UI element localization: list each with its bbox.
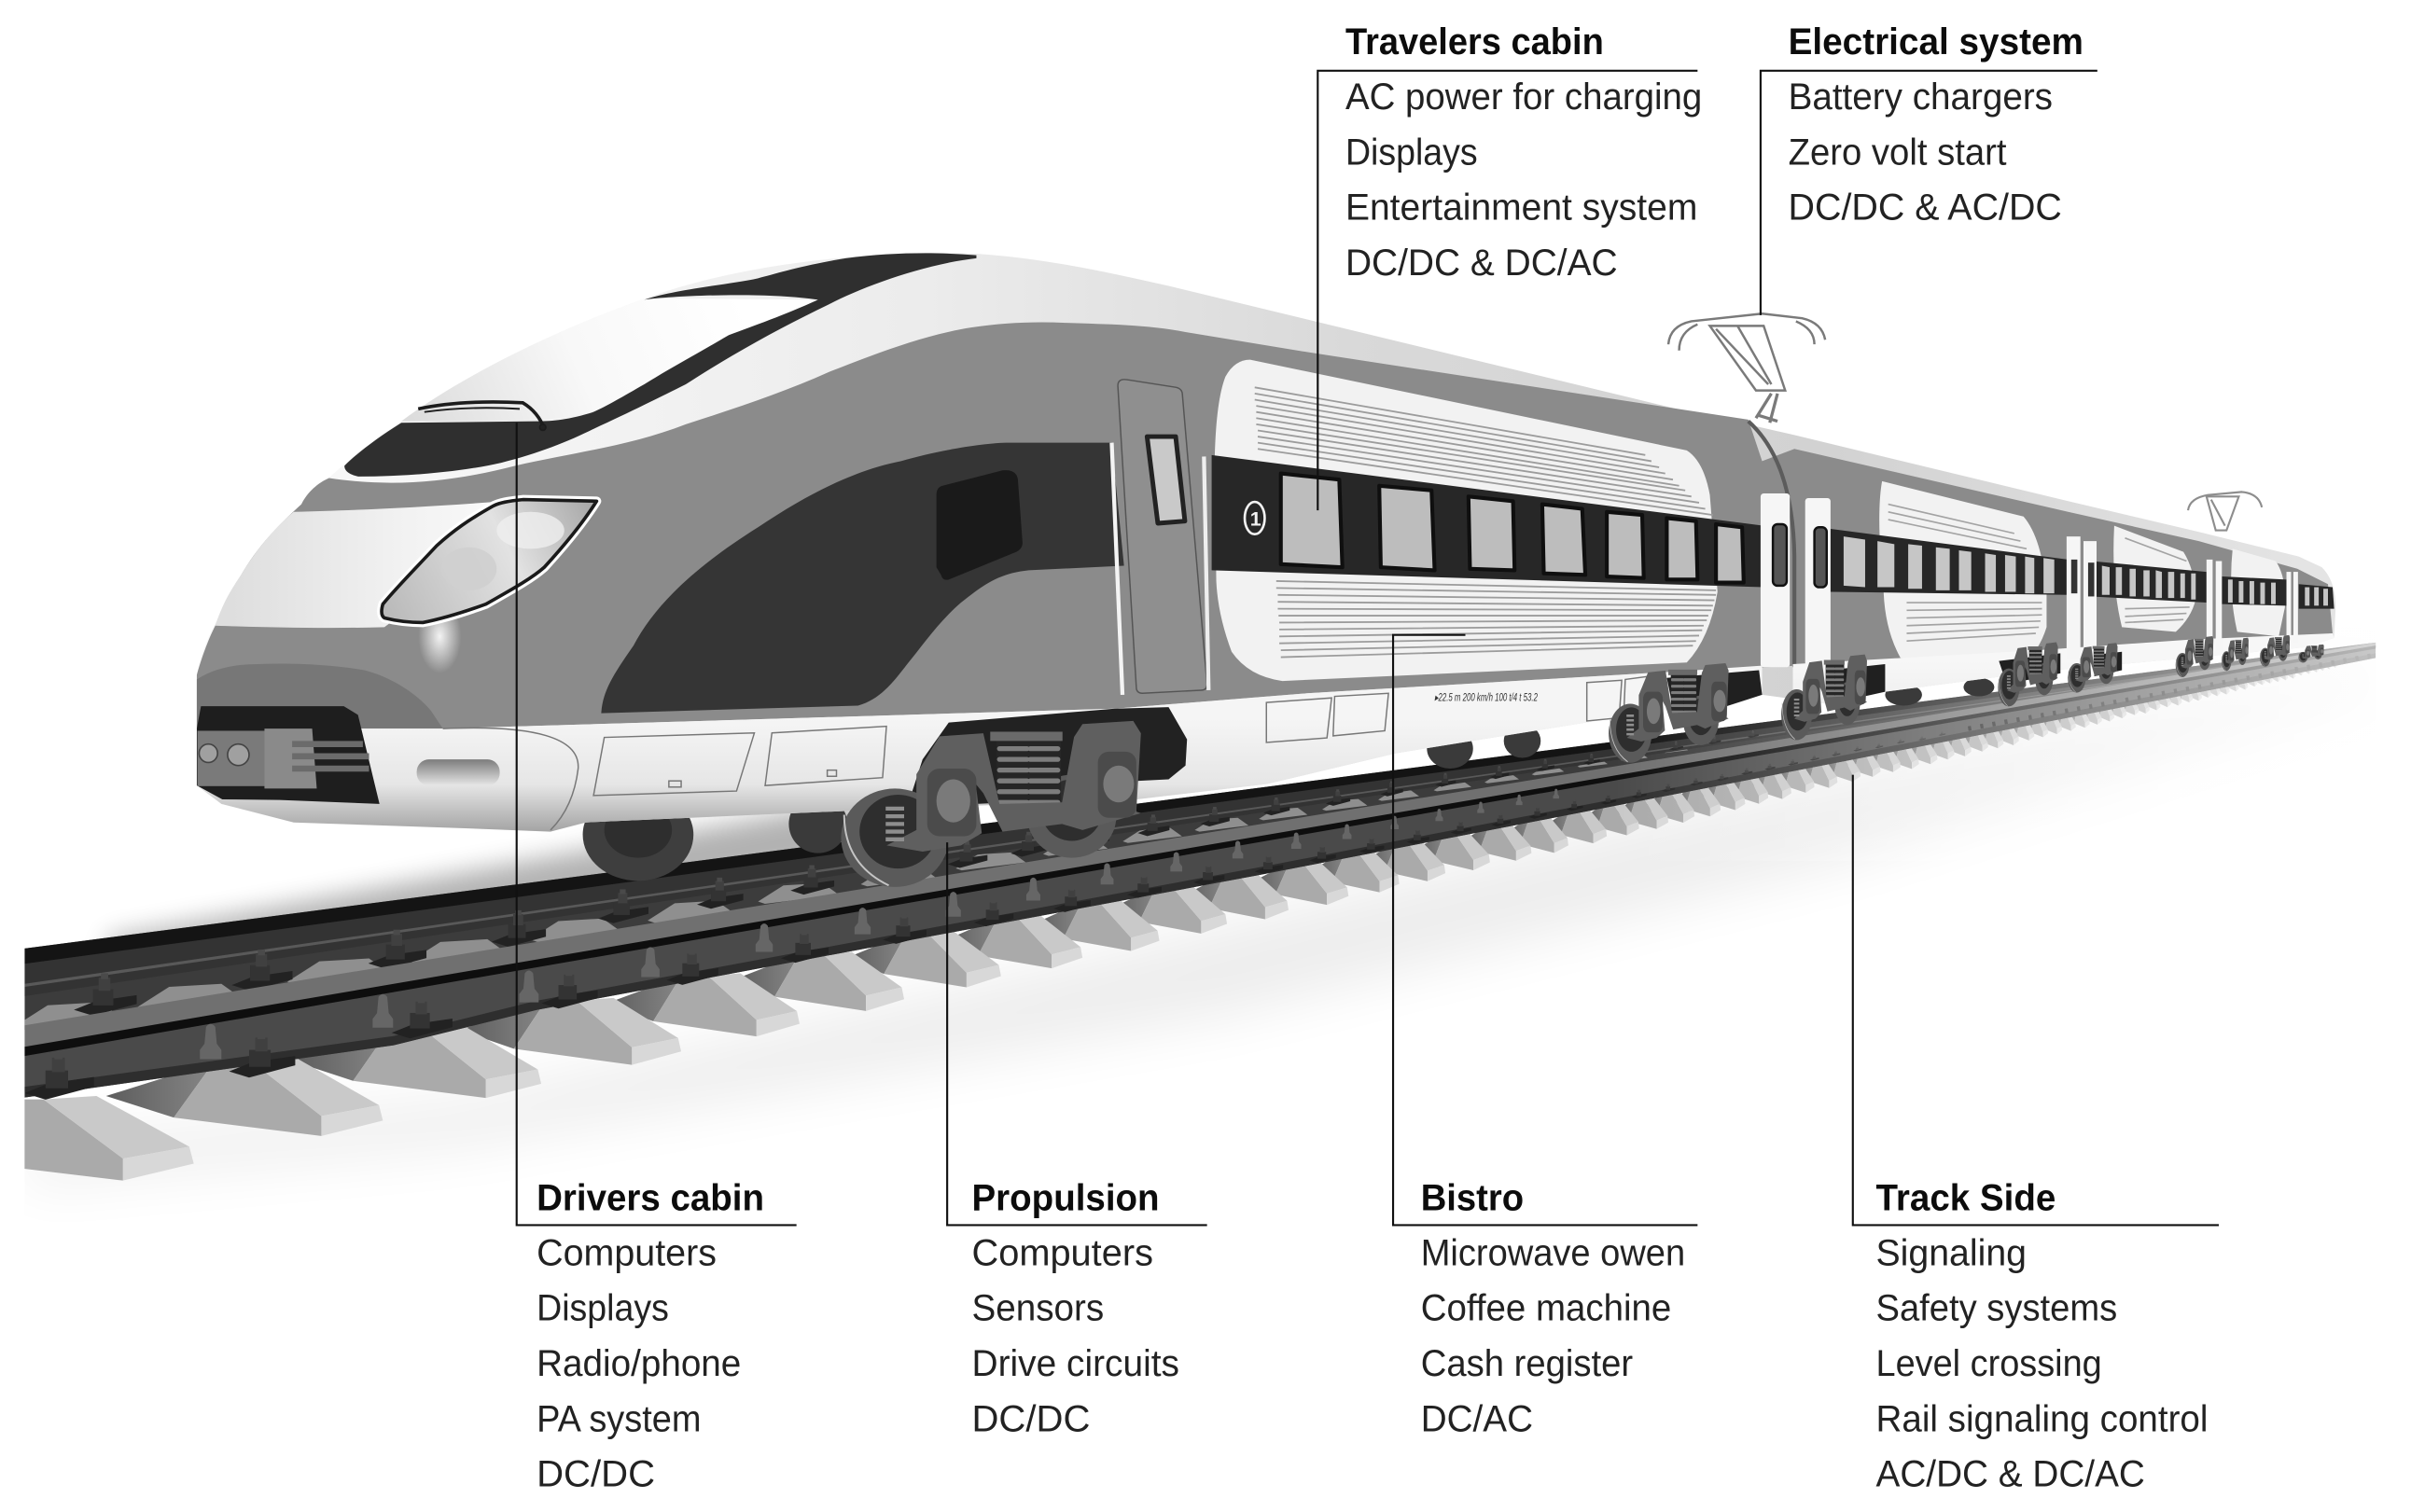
window bands, rear cars [1830,529,2334,609]
railway track [0,615,2376,1181]
far rail fasteners [74,730,1759,1016]
item list: Sensors [972,1288,1104,1329]
item list: Coffee machine [1421,1288,1671,1329]
leader line [1761,71,2097,315]
item list: Safety systems [1876,1288,2117,1329]
car number badge: 1 [1250,508,1261,531]
dark side panel [601,443,1124,714]
heading: Bistro [1421,1177,1524,1218]
leader line [517,423,797,1225]
leader line [1853,775,2219,1225]
headlight [382,500,596,622]
windows, rear cars [1844,536,2328,605]
item list: Drive circuits [972,1343,1179,1384]
train [197,253,2335,887]
concrete sleepers [0,658,2337,1181]
item list: Computers [972,1232,1153,1273]
item list: Displays [1345,132,1478,173]
gangway between cars [1749,422,1794,667]
item list: Cash register [1421,1343,1633,1384]
dark side window [937,470,1023,580]
item list: DC/DC [537,1454,655,1495]
carriage data text: ▸22.5 m 200 km/h 100 t/4 t 53.2 [1435,693,1538,704]
callout: Travelers cabin [1317,21,1702,510]
callout: Electrical system [1761,21,2097,315]
body silhouette [197,253,2335,832]
front bogie [841,721,1141,887]
heading: Propulsion [972,1177,1160,1218]
wheel well, front bogie [907,707,1187,807]
leader line [947,842,1207,1225]
white oval, car 3 [2113,526,2195,631]
callout: Track Side [1853,775,2219,1495]
item list: DC/AC [1421,1398,1533,1439]
heading: Drivers cabin [537,1177,764,1218]
item list: DC/DC & DC/AC [1345,243,1618,284]
glare on nose [418,600,461,673]
car number badge [1245,502,1264,534]
item list: Radio/phone [537,1343,741,1384]
item list [1789,76,2062,229]
item list: Rail signaling control [1876,1398,2208,1439]
item list [537,1232,741,1495]
front lower panel [197,664,443,728]
item list: Displays [537,1288,669,1329]
item list: Battery chargers [1789,76,2053,118]
item list: AC/DC & DC/AC [1876,1454,2145,1495]
white oval panel, car 1 [1215,360,1718,681]
near rail [24,643,2376,1098]
windshield highlight [401,298,818,422]
item list: AC power for charging [1345,76,1702,118]
window band, car 1 [1212,455,1763,588]
item list: Entertainment system [1345,187,1697,229]
windows, car 1 [1281,474,1744,583]
heading: Track Side [1876,1177,2056,1218]
item list [972,1232,1179,1439]
inner sleeper tops [14,746,1688,1030]
wheel wells, rear cars [1666,652,2122,723]
ground shadow under track [99,746,2079,1166]
pantograph: rear [2188,492,2262,531]
item list: PA system [537,1398,701,1439]
coupler recess [197,706,380,804]
wiper [418,402,546,430]
item list: DC/DC & AC/DC [1789,187,2062,229]
item list: Level crossing [1876,1343,2102,1384]
callout: Drivers cabin [517,423,797,1495]
item list: Computers [537,1232,717,1273]
item list: Zero volt start [1789,132,2007,173]
windshield dark band [344,253,976,477]
item list: Signaling [1876,1232,2027,1273]
heading: Electrical system [1789,21,2083,62]
lower skirt, rear cars [1793,633,2334,704]
heading: Travelers cabin [1345,21,1604,62]
wheels behind body [583,678,1994,881]
leader line [1317,71,1697,510]
far rail [24,643,2376,996]
pantograph: front [1668,313,1825,423]
nose white panel [216,500,523,628]
rear bogies [1609,635,2324,763]
louvre stripes, car 1 [1255,387,1716,658]
main grey livery [197,322,2333,728]
louvre stripes, rear cars [1888,505,2190,641]
item list [1876,1232,2208,1495]
near rail fasteners [24,731,1945,1100]
door [1111,380,1208,695]
item list: Microwave owen [1421,1232,1685,1273]
callout: Bistro [1393,635,1697,1439]
white oval, car 4 [2231,548,2285,636]
skirt panels [443,674,1660,830]
leader line [1393,635,1697,1225]
carriage doors, rear cars [1761,493,2298,667]
track bed between rails [24,643,2376,1091]
rail web bolts [200,789,1559,1059]
callout: Propulsion [947,842,1207,1439]
front vent [417,759,500,785]
item list [1421,1232,1685,1439]
white oval, car 2 [1879,481,2046,662]
item list: DC/DC [972,1398,1090,1439]
item list [1345,76,1702,284]
lower skirt, car 1 and nose [197,666,1763,832]
